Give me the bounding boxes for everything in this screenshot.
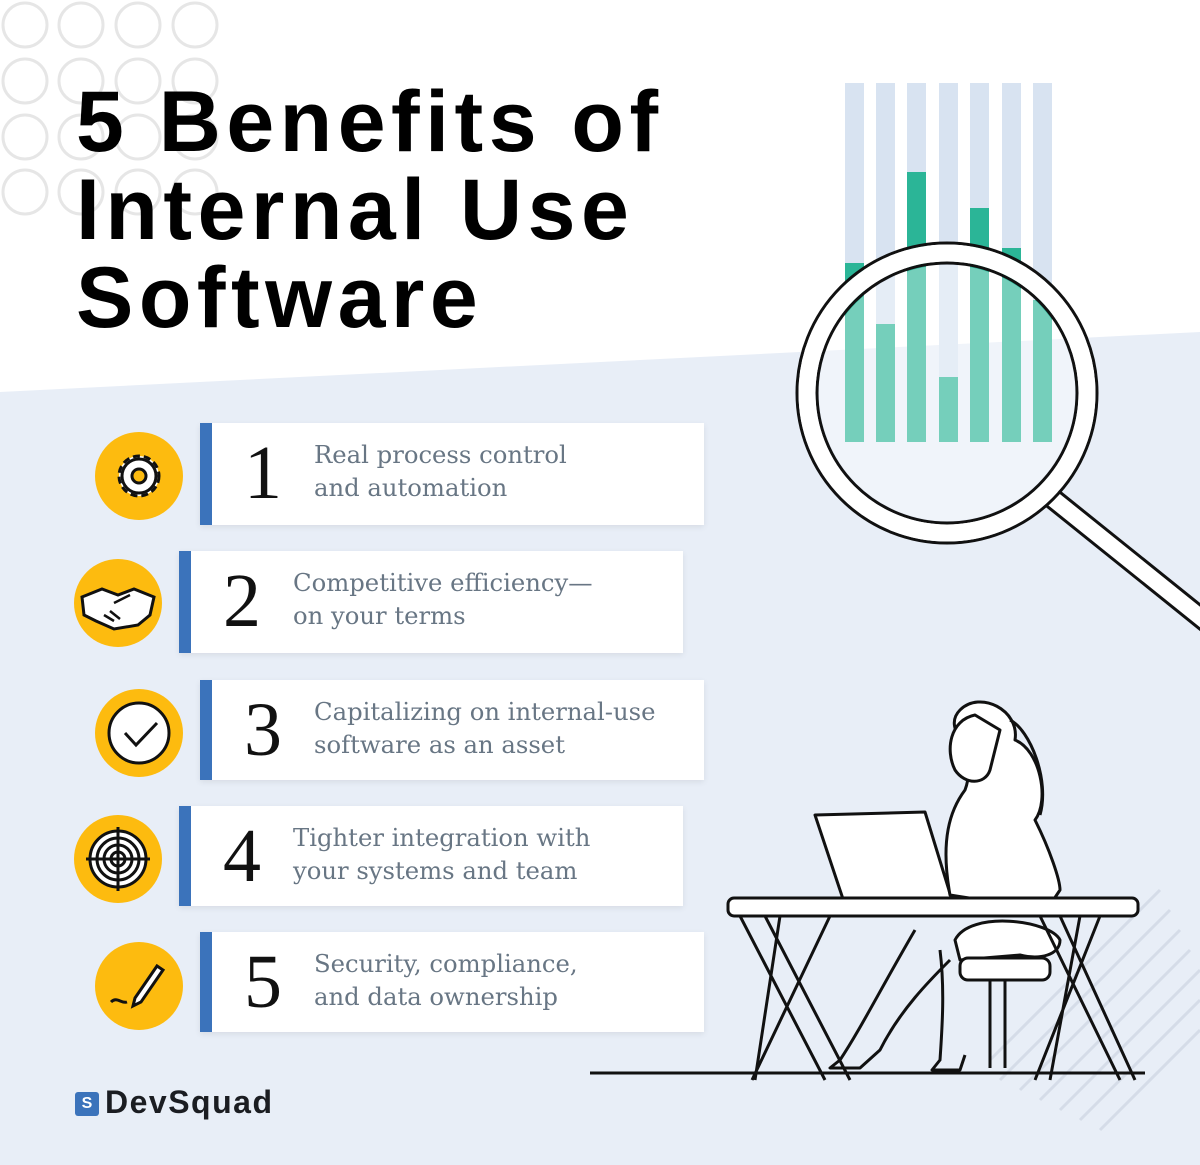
card 2: 2 [223, 559, 261, 643]
card 4: your systems and team [293, 856, 577, 885]
card 1: 1 [244, 431, 282, 515]
logo: DevSquad [105, 1084, 273, 1120]
icon: pen [95, 942, 183, 1030]
card 1: and automation [314, 473, 507, 502]
card 1: Real process control [314, 440, 567, 469]
card 3: 3 [244, 688, 282, 772]
title: Software [76, 250, 483, 346]
card 3 [200, 680, 704, 780]
icon: logo mark: S [82, 1095, 92, 1112]
icon: target [74, 815, 162, 903]
chart with magnifier [796, 83, 1200, 632]
card 2: on your terms [293, 601, 466, 630]
icon: logo mark [75, 1092, 99, 1116]
card 4: Tighter integration with [293, 823, 590, 852]
card 4: 4 [223, 814, 261, 898]
item 3 [95, 680, 704, 782]
item 1 [95, 423, 704, 528]
card 3: Capitalizing on internal-use [314, 697, 655, 726]
card 5: 5 [244, 940, 282, 1024]
icon: gear [95, 432, 183, 520]
item 4 [74, 806, 684, 908]
card 5: and data ownership [314, 982, 558, 1011]
item 5 [95, 932, 704, 1034]
card 5: Security, compliance, [314, 949, 578, 978]
icon: check [95, 689, 183, 777]
item 2 [74, 551, 684, 656]
card 3: software as an asset [314, 730, 565, 759]
card 2: Competitive efficiency— [293, 568, 593, 597]
card 5 [200, 932, 704, 1032]
card 2 [179, 551, 683, 653]
title: 5 Benefits of [76, 74, 664, 170]
title [76, 74, 664, 346]
title: Internal Use [76, 162, 634, 258]
card 1 [200, 423, 704, 525]
card 4 [179, 806, 683, 906]
person at desk illustration [590, 700, 1145, 1081]
icon: handshake [74, 559, 162, 647]
